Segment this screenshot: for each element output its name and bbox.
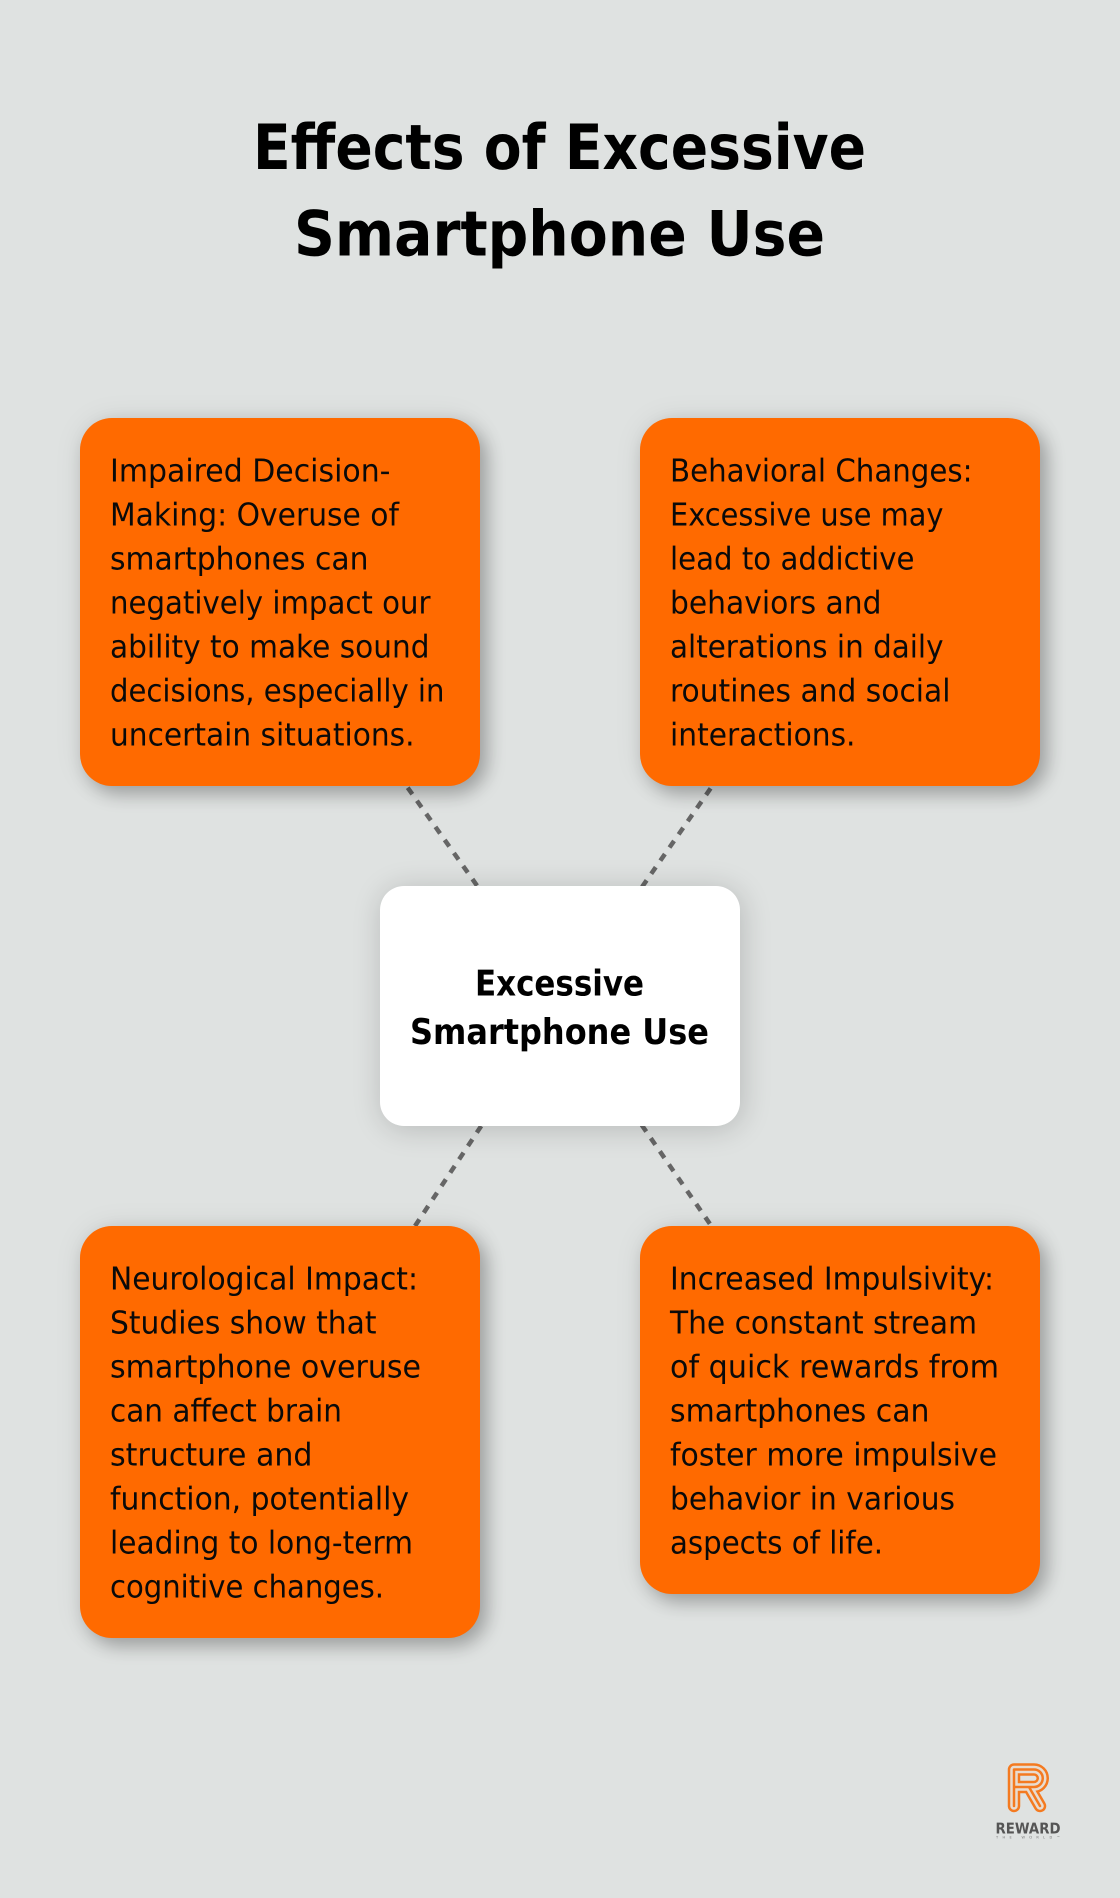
wordmark: REWARD bbox=[996, 1820, 1060, 1838]
text: increased impulsivity: smartphones can bbox=[670, 1394, 930, 1430]
text: increased impulsivity: of quick rewards from bbox=[670, 1350, 999, 1386]
text: neurological impact: structure and bbox=[110, 1438, 312, 1474]
text: neurological impact: leading to long-term bbox=[110, 1526, 413, 1562]
text: behavioral changes: Excessive use may bbox=[670, 498, 944, 534]
text: central node label: Excessive bbox=[475, 964, 644, 1004]
wordmark: THE WORLD™ bbox=[995, 1836, 1060, 1840]
text: impaired decision-making: uncertain situations. bbox=[110, 718, 414, 754]
text: behavioral changes bbox=[670, 454, 972, 754]
text: neurological impact: Studies show that bbox=[110, 1306, 376, 1342]
text: impaired decision-making: decisions, especially in bbox=[110, 674, 444, 710]
text: impaired decision-making: smartphones can bbox=[110, 542, 368, 578]
panel: impaired decision-making bbox=[80, 418, 480, 786]
central node: excessive smartphone use bbox=[380, 886, 740, 1126]
text: neurological impact: function, potentially bbox=[110, 1482, 409, 1518]
text: increased impulsivity: foster more impulsive bbox=[670, 1438, 997, 1474]
text: increased impulsivity: aspects of life. bbox=[670, 1526, 883, 1562]
text: behavioral changes: routines and social bbox=[670, 674, 950, 710]
title: Effects of Excessive bbox=[253, 111, 866, 184]
text: behavioral changes: Behavioral Changes: bbox=[670, 454, 972, 490]
text: impaired decision-making: Making: Overuse of bbox=[110, 498, 400, 534]
logo: Reward the World bbox=[995, 1763, 1060, 1840]
text: increased impulsivity: Increased Impulsivity: bbox=[670, 1262, 994, 1298]
panel: neurological impact bbox=[80, 1226, 480, 1638]
dashed connectors bbox=[406, 786, 712, 1226]
text: behavioral changes: lead to addictive bbox=[670, 542, 914, 578]
title: Smartphone Use bbox=[294, 198, 825, 270]
text: neurological impact: cognitive changes. bbox=[110, 1570, 384, 1606]
icon: R mark bbox=[1014, 1770, 1043, 1806]
title bbox=[253, 111, 866, 270]
text: increased impulsivity: behavior in various bbox=[670, 1482, 955, 1518]
text: behavioral changes: behaviors and bbox=[670, 586, 882, 622]
text: neurological impact: smartphone overuse bbox=[110, 1350, 421, 1386]
text: neurological impact: can affect brain bbox=[110, 1394, 342, 1430]
text: behavioral changes: interactions. bbox=[670, 718, 856, 754]
text: neurological impact bbox=[110, 1262, 421, 1606]
panel: increased impulsivity bbox=[640, 1226, 1040, 1594]
text: increased impulsivity: The constant stream bbox=[669, 1306, 977, 1342]
text: impaired decision-making: ability to make sound bbox=[110, 630, 430, 666]
panel: behavioral changes bbox=[640, 418, 1040, 786]
text: neurological impact: Neurological Impact: bbox=[110, 1262, 418, 1298]
text: increased impulsivity bbox=[669, 1262, 999, 1562]
text: central node label: Smartphone Use bbox=[410, 1012, 709, 1053]
text: impaired decision-making: Impaired Decision- bbox=[110, 454, 390, 490]
text: impaired decision-making: negatively impact our bbox=[110, 586, 431, 622]
text: impaired decision-making bbox=[110, 454, 444, 754]
text: central node label bbox=[410, 964, 709, 1053]
text: behavioral changes: alterations in daily bbox=[670, 630, 944, 666]
